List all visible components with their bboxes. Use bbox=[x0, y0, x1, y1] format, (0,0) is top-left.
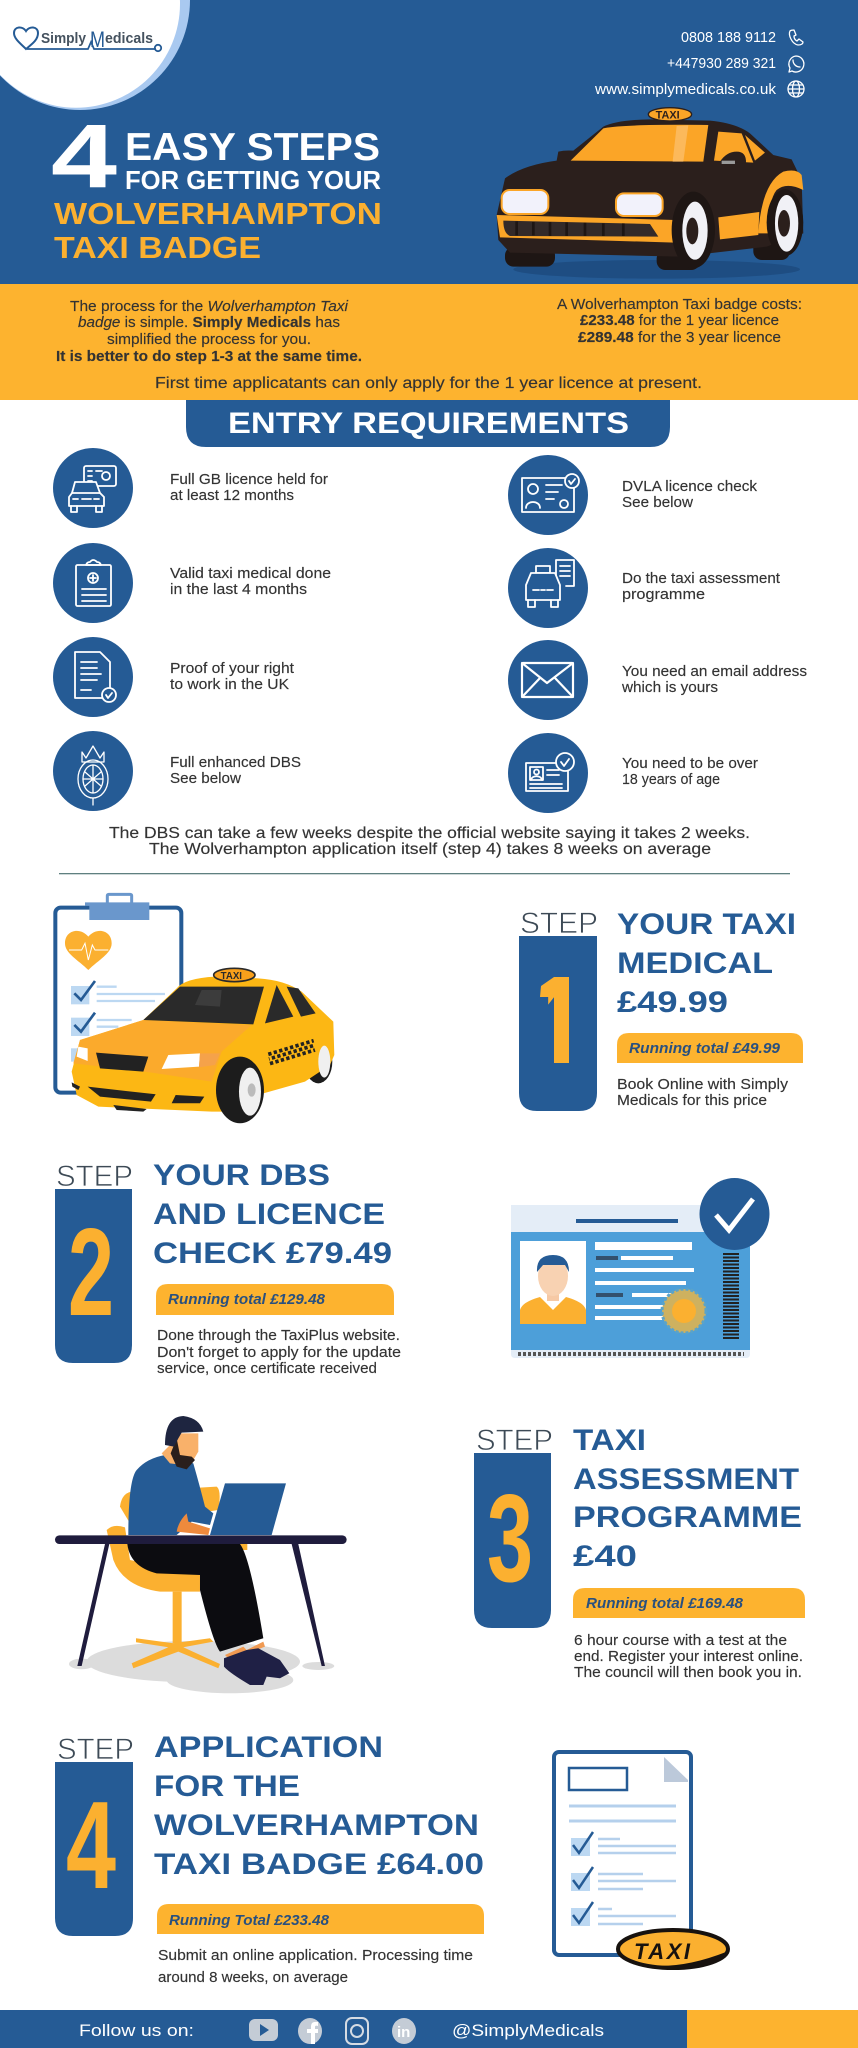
requirement: right to work: to work in the UK bbox=[170, 676, 289, 693]
requirement: right to work: Proof of your right bbox=[170, 660, 295, 677]
text block: costs: £289.48 for the 3 year licence bbox=[578, 329, 781, 346]
step 4 badge: 4 bbox=[66, 1777, 116, 1915]
yellow information panel bbox=[0, 284, 858, 400]
step 4 running total bbox=[157, 1904, 484, 1934]
step 2 badge: STEP bbox=[56, 1160, 133, 1193]
requirement: enhanced DBS crest: See below bbox=[170, 770, 241, 787]
requirement: GB licence bbox=[53, 448, 328, 528]
text block: costs: A Wolverhampton Taxi badge costs: bbox=[557, 296, 802, 313]
step 2 heading: AND LICENCE bbox=[153, 1198, 385, 1231]
requirement: email address: which is yours bbox=[621, 679, 718, 696]
step 3 description: 6 hour course with a test at the bbox=[574, 1632, 787, 1649]
text block: timing notes: The DBS can take a few weeks despite the official website saying it takes 2 weeks. bbox=[109, 825, 750, 842]
step 1 badge bbox=[519, 907, 598, 1111]
step 3 description bbox=[574, 1632, 803, 1681]
step 4 heading: TAXI BADGE £64.00 bbox=[154, 1848, 484, 1881]
step 3 running total: Running total £169.48 bbox=[586, 1596, 744, 1612]
logo bbox=[14, 27, 161, 52]
text block: process: It is better to do step 1-3 at the same time. bbox=[56, 348, 362, 365]
text block: process: simplified the process for you. bbox=[107, 331, 311, 348]
requirement: DVLA check bbox=[508, 455, 757, 535]
table bbox=[55, 1535, 347, 1666]
requirement: over 18: You need to be over bbox=[622, 755, 758, 772]
trousers bbox=[127, 1544, 263, 1652]
step 4 description: Submit an online application. Processing time bbox=[158, 1947, 473, 1964]
yellow taxi: TAXI bbox=[221, 971, 242, 982]
step 1 description: Medicals for this price bbox=[617, 1092, 767, 1109]
black taxi illustration: TAXI bbox=[656, 110, 680, 122]
step 4 heading bbox=[154, 1731, 484, 1881]
icon: linkedin bbox=[392, 2018, 416, 2044]
heading: entry requirements bbox=[186, 400, 670, 447]
requirement: enhanced DBS crest bbox=[53, 731, 301, 811]
illustration: application form and taxi sign: TAXI bbox=[634, 1939, 691, 1964]
footer bar: Follow us on: bbox=[79, 2021, 194, 2040]
clipboard bbox=[55, 894, 181, 1093]
step 3 heading bbox=[573, 1424, 802, 1573]
step 3 badge: STEP bbox=[476, 1424, 553, 1457]
chair bbox=[107, 1487, 247, 1668]
torso bbox=[128, 1455, 213, 1535]
step 2 heading: CHECK £79.49 bbox=[153, 1237, 392, 1270]
yellow taxi bbox=[72, 968, 334, 1123]
step 1 heading bbox=[617, 908, 796, 1019]
header panel bbox=[0, 0, 858, 284]
contact details: www.simplymedicals.co.uk bbox=[594, 81, 777, 98]
title bbox=[51, 107, 382, 265]
text block: process: badge is simple. Simply Medicals has bbox=[78, 314, 340, 331]
step 3 badge: 3 bbox=[487, 1470, 533, 1608]
text block: costs bbox=[557, 296, 802, 346]
step 1 running total: Running total £49.99 bbox=[629, 1041, 780, 1057]
title: 4 bbox=[51, 107, 117, 207]
icon: youtube bbox=[249, 2019, 278, 2041]
step 2 bbox=[55, 1159, 401, 1377]
illustration: man at laptop bbox=[55, 1416, 347, 1693]
contact details: +447930 289 321 bbox=[667, 55, 776, 72]
contact details bbox=[594, 29, 804, 98]
requirement: enhanced DBS crest: Full enhanced DBS bbox=[170, 754, 301, 771]
step 1 description: Book Online with Simply bbox=[617, 1076, 789, 1093]
step 4 heading: WOLVERHAMPTON bbox=[154, 1809, 479, 1842]
illustration: licence card bbox=[511, 1178, 770, 1358]
step 1 bbox=[519, 907, 803, 1111]
title: FOR GETTING YOUR bbox=[125, 165, 381, 195]
requirement: right to work bbox=[53, 637, 295, 717]
laptop bbox=[210, 1483, 286, 1535]
step 4 running total: Running Total £233.48 bbox=[169, 1913, 330, 1929]
requirement: taxi medical: in the last 4 months bbox=[170, 581, 307, 598]
step 2 badge: 2 bbox=[68, 1204, 114, 1342]
illustration: application form and taxi sign bbox=[554, 1752, 728, 1969]
requirement: assessment programme: programme bbox=[622, 586, 705, 603]
head bbox=[162, 1416, 203, 1469]
step 4 heading: APPLICATION bbox=[154, 1731, 383, 1764]
requirement: over 18 bbox=[508, 733, 758, 813]
step 2 badge bbox=[55, 1160, 133, 1363]
step 3 description: The council will then book you in. bbox=[574, 1664, 802, 1681]
shoes bbox=[224, 1642, 289, 1685]
footer bar: @SimplyMedicals bbox=[452, 2021, 604, 2040]
step 1 heading: YOUR TAXI bbox=[617, 908, 796, 941]
text block: timing notes: The Wolverhampton application itself (step 4) takes 8 weeks on average bbox=[149, 841, 711, 858]
step 3 running total bbox=[573, 1588, 805, 1618]
requirement: DVLA check: DVLA licence check bbox=[622, 478, 757, 495]
step 3 bbox=[474, 1424, 805, 1681]
black taxi illustration bbox=[497, 108, 803, 279]
step 3 heading: ASSESSMENT bbox=[573, 1463, 799, 1496]
step 2 running total: Running total £129.48 bbox=[168, 1292, 326, 1308]
hand bbox=[177, 1513, 210, 1535]
requirement: GB licence: at least 12 months bbox=[170, 487, 294, 504]
step 3 description: end. Register your interest online. bbox=[574, 1648, 803, 1665]
step 1 heading: MEDICAL bbox=[617, 947, 773, 980]
step 3 heading: TAXI bbox=[573, 1424, 646, 1457]
step 2 heading bbox=[153, 1159, 392, 1270]
step 2 description: Done through the TaxiPlus website. bbox=[157, 1327, 400, 1344]
step 2 description bbox=[157, 1327, 401, 1377]
illustration: clipboard and yellow taxi bbox=[55, 894, 334, 1123]
step 1 running total bbox=[617, 1033, 803, 1063]
requirement: email address bbox=[508, 640, 807, 720]
step 4 badge: STEP bbox=[57, 1733, 134, 1766]
logo: edicals bbox=[105, 30, 153, 47]
requirement: taxi medical: Valid taxi medical done bbox=[170, 565, 331, 582]
requirement: assessment programme bbox=[508, 548, 781, 628]
logo: Simply bbox=[41, 30, 87, 47]
title: TAXI BADGE bbox=[54, 230, 261, 265]
text block: first time note: First time applicatants can only apply for the 1 year licence at present. bbox=[155, 375, 702, 392]
step 1 badge: STEP bbox=[520, 907, 598, 940]
text block: process bbox=[56, 298, 362, 365]
step 2 description: Don't forget to apply for the update bbox=[157, 1344, 401, 1361]
title: EASY STEPS bbox=[125, 126, 380, 169]
requirement: assessment programme: Do the taxi assessment bbox=[622, 570, 781, 587]
footer bar bbox=[0, 2010, 858, 2048]
step 3 heading: £40 bbox=[573, 1540, 637, 1573]
step 3 badge bbox=[474, 1424, 553, 1628]
step 1 badge: 1 bbox=[544, 952, 578, 1090]
requirement: taxi medical bbox=[53, 543, 331, 623]
step 2 running total bbox=[156, 1284, 394, 1315]
step 4 heading: FOR THE bbox=[154, 1770, 300, 1803]
contact details: 0808 188 9112 bbox=[681, 29, 776, 46]
logo: M bbox=[90, 27, 105, 52]
step 1 description bbox=[617, 1076, 789, 1109]
requirement: GB licence: Full GB licence held for bbox=[170, 471, 328, 488]
title: WOLVERHAMPTON bbox=[54, 196, 382, 231]
requirement: email address: You need an email address bbox=[622, 663, 807, 680]
text block: process: The process for the Wolverhampton Taxi bbox=[70, 298, 349, 315]
icon: facebook bbox=[298, 2018, 322, 2044]
text block: timing notes bbox=[109, 825, 750, 858]
step 2 heading: YOUR DBS bbox=[153, 1159, 330, 1192]
icon: linkedin: in bbox=[397, 2024, 410, 2041]
heading: entry requirements: ENTRY REQUIREMENTS bbox=[228, 407, 629, 440]
step 4 bbox=[55, 1731, 484, 1986]
step 4 badge bbox=[55, 1733, 134, 1936]
step 3 heading: PROGRAMME bbox=[573, 1501, 802, 1534]
floor shadow bbox=[69, 1641, 334, 1693]
step 2 description: service, once certificate received bbox=[157, 1360, 377, 1377]
requirement: DVLA check: See below bbox=[622, 494, 693, 511]
step 4 description bbox=[158, 1947, 473, 1986]
text block: costs: £233.48 for the 1 year licence bbox=[580, 312, 779, 329]
requirement: over 18: 18 years of age bbox=[622, 771, 720, 788]
step 1 heading: £49.99 bbox=[617, 986, 728, 1019]
step 4 description: around 8 weeks, on average bbox=[158, 1969, 348, 1986]
icon: instagram bbox=[346, 2018, 368, 2044]
